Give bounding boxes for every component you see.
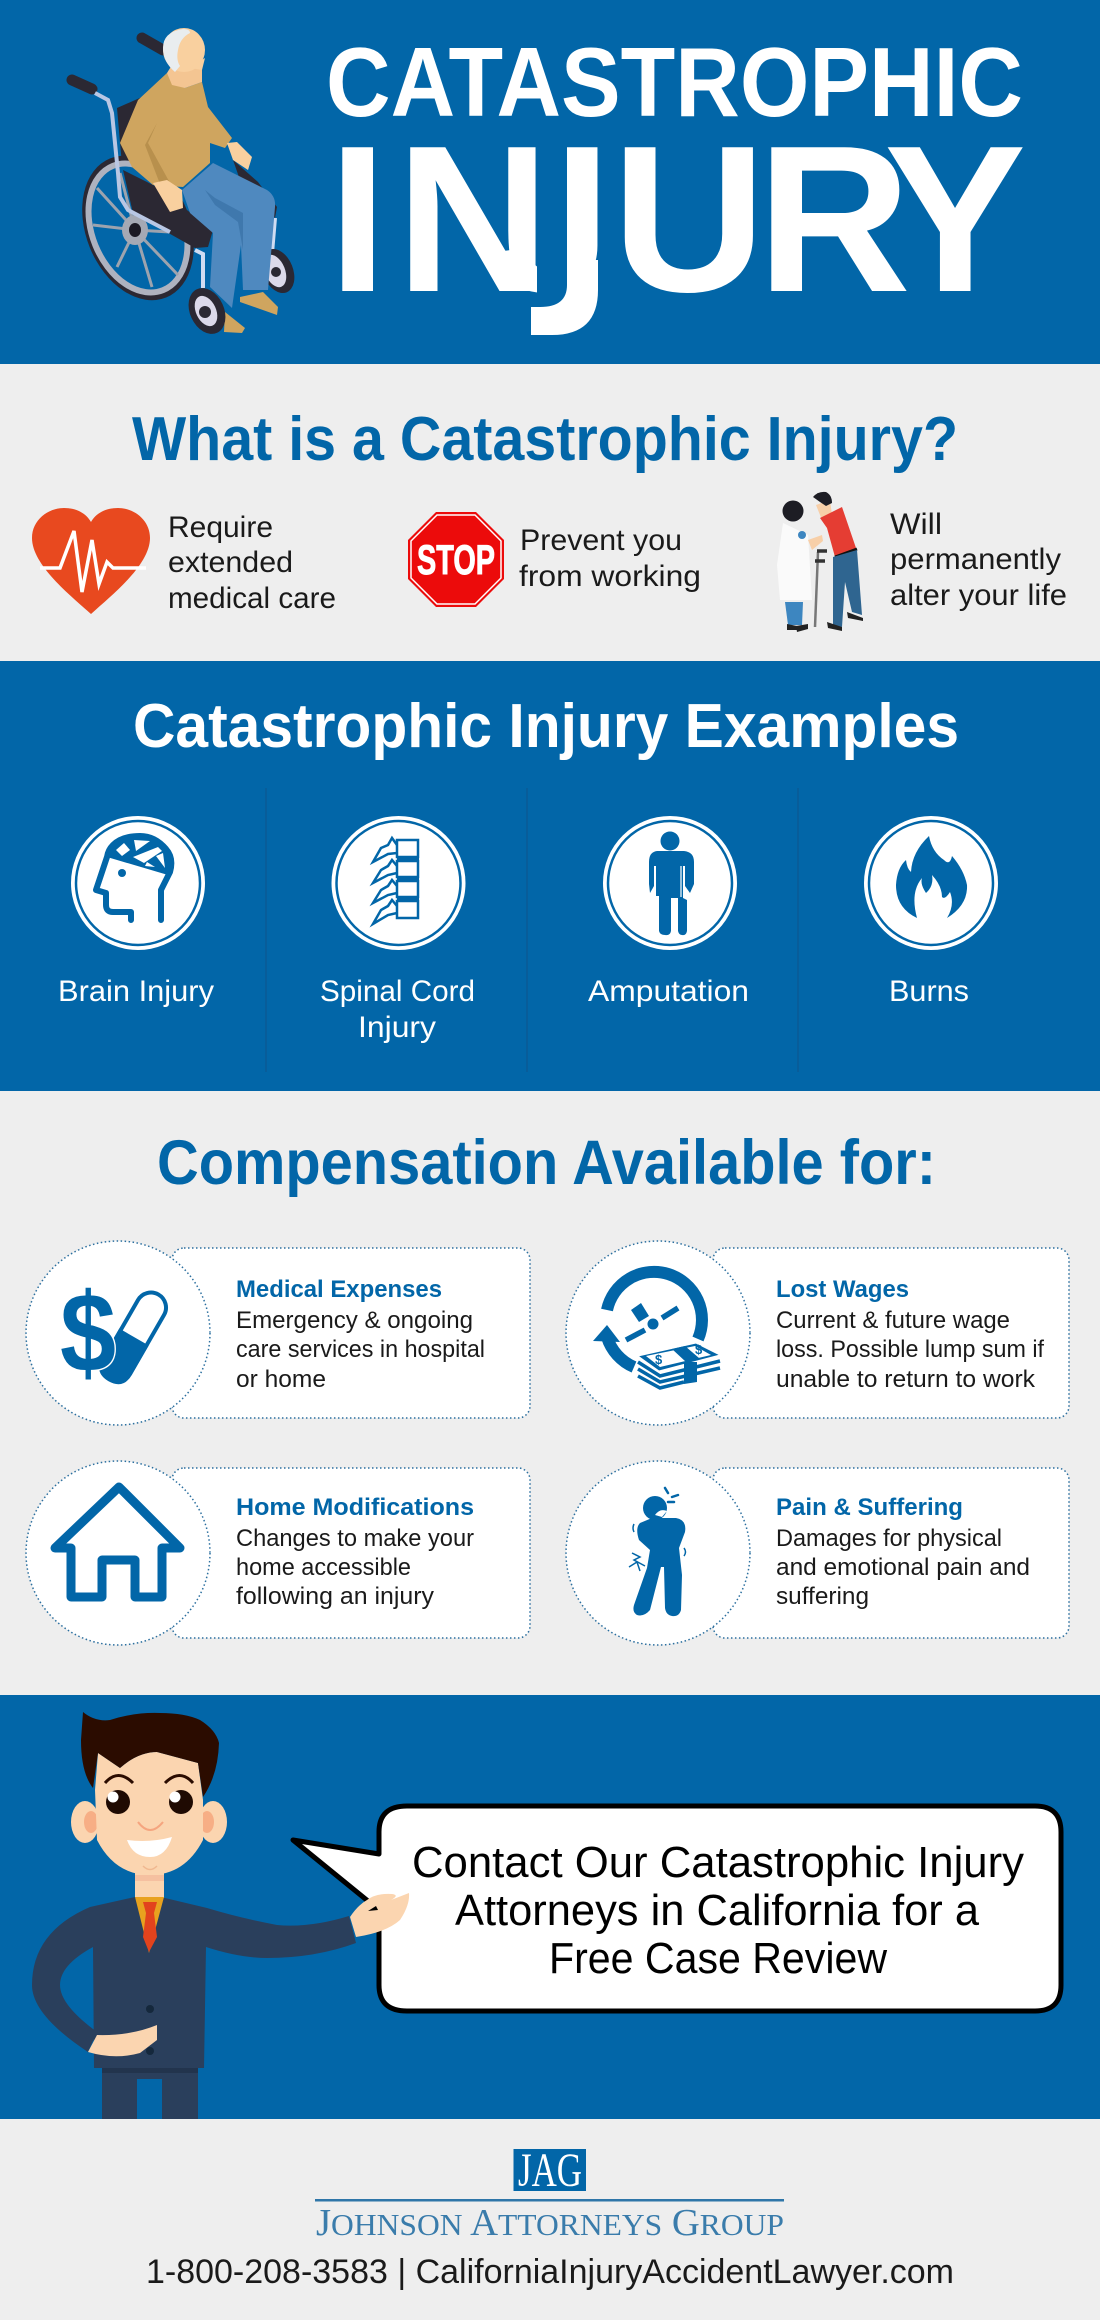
card: pain and suffering: and emotional pain and (776, 1554, 1030, 1581)
card: lost wages: Current & future wage (776, 1307, 1010, 1334)
card: home modifications: Home Modifications (236, 1494, 474, 1521)
panel: footer (146, 2144, 954, 2291)
text: will permanently alter your life: alter your life (890, 579, 1067, 612)
card: pain and suffering: Damages for physical (776, 1525, 1002, 1552)
J descender (531, 260, 598, 335)
icon: man in wheelchair (62, 28, 301, 340)
logo: JAG (518, 2144, 582, 2197)
example: brain injury: Brain Injury (58, 975, 214, 1008)
card: pain and suffering: suffering (776, 1583, 869, 1610)
icon: clock and money: $ (655, 1352, 663, 1367)
example: spinal cord injury: Injury (358, 1011, 436, 1044)
logo: JOHNSON ATTORNEYS GROUP (316, 2202, 784, 2244)
card: home modifications: following an injury (236, 1583, 434, 1610)
text: prevent you from working: Prevent you (520, 524, 682, 557)
bubble text: Contact Our Catastrophic Injury (412, 1838, 1024, 1887)
icon: stop sign: STOP (417, 536, 495, 583)
panel: compensation (26, 1128, 1069, 1645)
text: will permanently alter your life: Will (890, 508, 942, 541)
card: medical expenses: care services in hospital (236, 1336, 485, 1363)
card: home modifications: home accessible (236, 1554, 411, 1581)
example: amputation (588, 816, 749, 1008)
card: medical expenses: or home (236, 1366, 326, 1393)
title: injury: INJURY (328, 102, 1026, 336)
card: pain and suffering: Pain & Suffering (776, 1494, 963, 1521)
bubble text (412, 1838, 1024, 1983)
speech bubble (293, 1806, 1061, 2011)
card: lost wages: loss. Possible lump sum if (776, 1336, 1044, 1363)
icon: stop sign (408, 512, 504, 607)
icon: dollar and pill: $ (60, 1270, 116, 1395)
text: will permanently alter your life (890, 508, 1067, 612)
J hook cover (537, 130, 567, 299)
text: will permanently alter your life: permanently (890, 543, 1061, 576)
panel: examples (0, 661, 1100, 1091)
icon: heart (32, 508, 150, 614)
example: spinal cord injury (320, 816, 475, 1044)
card: lost wages: Lost Wages (776, 1276, 909, 1303)
card: medical expenses: Emergency & ongoing (236, 1307, 473, 1334)
panel: call to action (0, 1695, 1100, 2119)
example: burns (864, 816, 998, 1008)
heading: examples: Catastrophic Injury Examples (133, 692, 959, 761)
panel: what is (32, 405, 1067, 632)
card: medical expenses: Medical Expenses (236, 1276, 442, 1303)
panel: header (0, 0, 1100, 364)
bubble text: Free Case Review (549, 1934, 887, 1983)
example: brain injury (58, 816, 214, 1008)
icon: clock and money: $ (695, 1342, 703, 1357)
heading: compensation: Compensation Available for: (157, 1128, 936, 1198)
bubble text: Attorneys in California for a (455, 1886, 980, 1935)
card: pain and suffering (566, 1461, 1069, 1645)
icon: dollar and pill (60, 1270, 173, 1395)
text: prevent you from working (519, 524, 701, 593)
card: lost wages (566, 1241, 1069, 1425)
card: lost wages: unable to return to work (776, 1366, 1036, 1393)
contact line: 1-800-208-3583 | CaliforniaInjuryAccidentLawyer.com (146, 2253, 954, 2291)
title: catastrophic: CATASTROPHIC (326, 27, 1023, 137)
text: require extended medical care: Require (168, 511, 273, 544)
card: home modifications (26, 1461, 530, 1645)
card: home modifications: Changes to make your (236, 1525, 474, 1552)
icon: clock and money (593, 1272, 720, 1388)
text: require extended medical care: medical care (168, 582, 336, 615)
illustration: attorney (32, 1712, 409, 2119)
heading: what is: What is a Catastrophic Injury? (132, 405, 958, 474)
icon: house (55, 1487, 180, 1597)
text: require extended medical care: extended (168, 546, 293, 579)
example: burns: Burns (889, 975, 969, 1008)
text: require extended medical care (168, 511, 336, 615)
card: medical expenses (26, 1241, 530, 1425)
logo (315, 2144, 784, 2244)
example: spinal cord injury: Spinal Cord (320, 975, 475, 1008)
example: amputation: Amputation (588, 975, 749, 1008)
text: prevent you from working: from working (519, 560, 701, 593)
icon: person in pain (629, 1488, 686, 1616)
icon: patient with helper (777, 492, 863, 632)
